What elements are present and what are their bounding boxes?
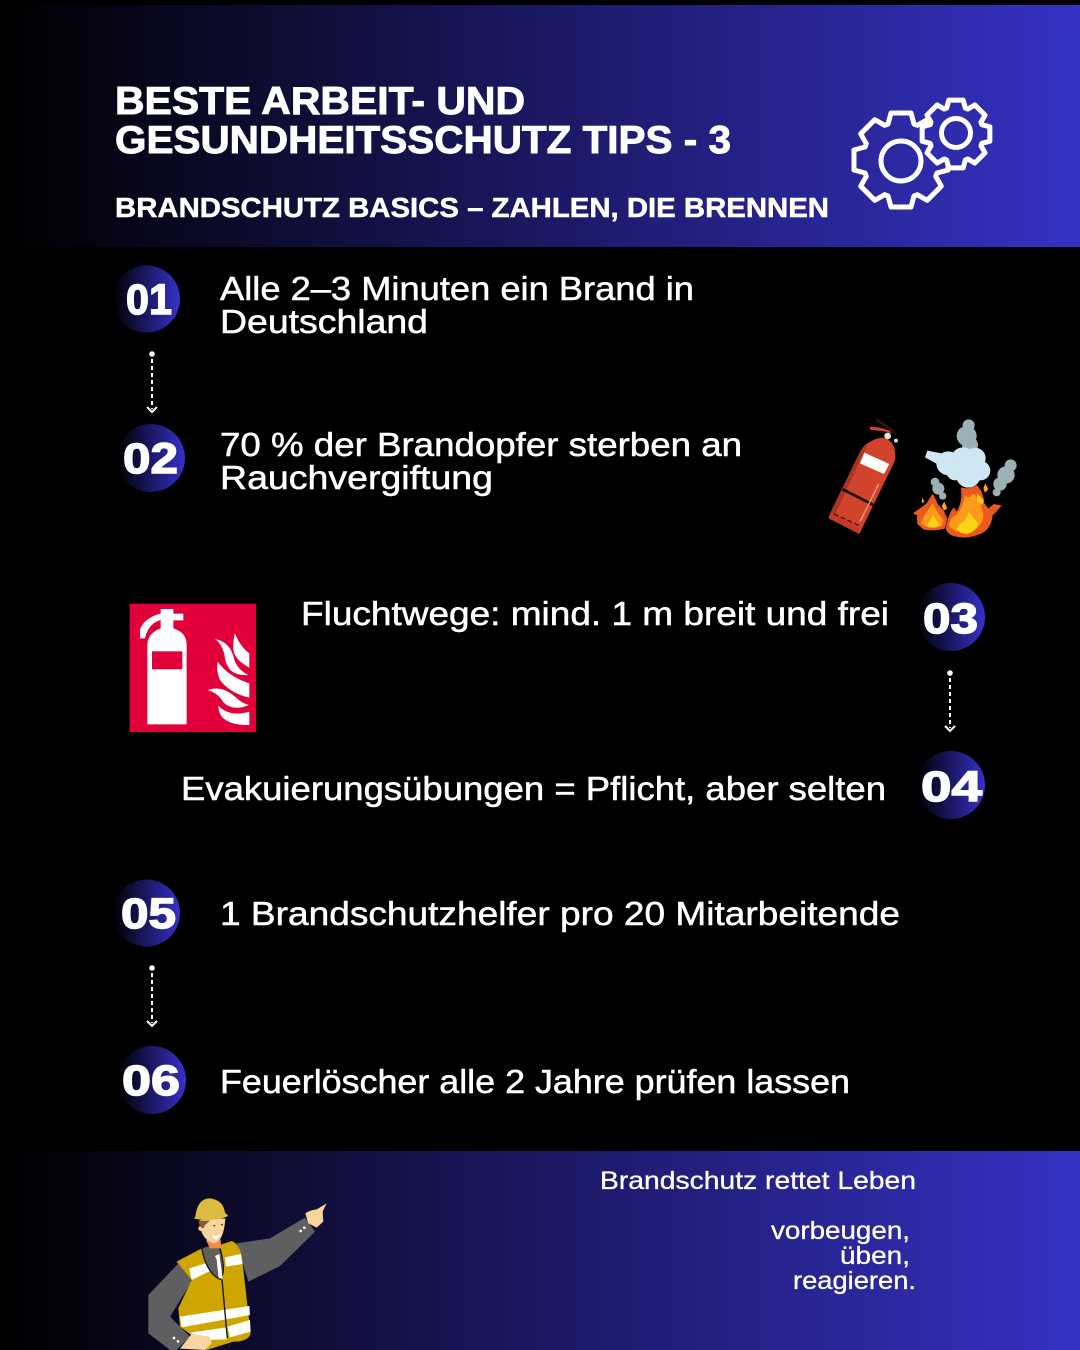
arrow: 01 to 02 <box>147 351 157 412</box>
step 01 text: Alle 2–3 Minuten ein Brand in <box>220 270 694 307</box>
icon: safety worker pointing <box>148 1198 327 1350</box>
step 03 badge <box>917 583 985 651</box>
title: GESUNDHEITSSCHUTZ TIPS - 3 <box>115 119 731 162</box>
step 02 text <box>220 426 742 496</box>
step 01 text <box>220 270 694 340</box>
step 06 text: Feuerlöscher alle 2 Jahre prüfen lassen <box>220 1063 850 1100</box>
arrow: 05 to 06 <box>147 965 157 1026</box>
step 01 text: Deutschland <box>220 303 428 340</box>
step 02 badge: 02 <box>123 435 178 483</box>
icon: fire extinguisher safety sign <box>130 604 256 732</box>
arrow: 03 to 04 <box>945 670 955 731</box>
step 03 badge: 03 <box>923 595 978 643</box>
step 06 badge <box>118 1046 186 1114</box>
icon: gears <box>854 100 990 207</box>
step 04 text: Evakuierungsübungen = Pflicht, aber selten <box>181 770 886 807</box>
footer message: üben, <box>840 1242 910 1270</box>
icon: fire extinguisher illustration <box>829 418 898 534</box>
panel: footer <box>0 1151 1080 1350</box>
subtitle: BRANDSCHUTZ BASICS – ZAHLEN, DIE BRENNEN <box>115 192 829 223</box>
step 06 badge: 06 <box>122 1057 180 1105</box>
step 02 text: 70 % der Brandopfer sterben an <box>220 426 742 463</box>
step 02 text: Rauchvergiftung <box>220 459 493 496</box>
icon: fire and smoke illustration <box>913 419 1017 537</box>
footer heading: Brandschutz rettet Leben <box>600 1167 916 1195</box>
footer message: vorbeugen, <box>771 1217 910 1245</box>
step 04 badge: 04 <box>921 763 982 811</box>
step 01 badge: 01 <box>126 276 172 324</box>
footer message: reagieren. <box>793 1267 916 1295</box>
title: BESTE ARBEIT- UND <box>115 80 525 123</box>
step 02 badge <box>117 424 185 492</box>
step 05 text: 1 Brandschutzhelfer pro 20 Mitarbeitende <box>220 895 900 932</box>
step 05 badge <box>113 880 180 946</box>
step 01 badge <box>113 266 180 332</box>
step 05 badge: 05 <box>121 890 176 938</box>
title <box>115 80 731 162</box>
step 04 badge <box>917 751 985 819</box>
step 03 text: Fluchtwege: mind. 1 m breit und frei <box>301 595 889 632</box>
panel: header <box>0 5 1080 247</box>
footer message <box>771 1217 916 1295</box>
